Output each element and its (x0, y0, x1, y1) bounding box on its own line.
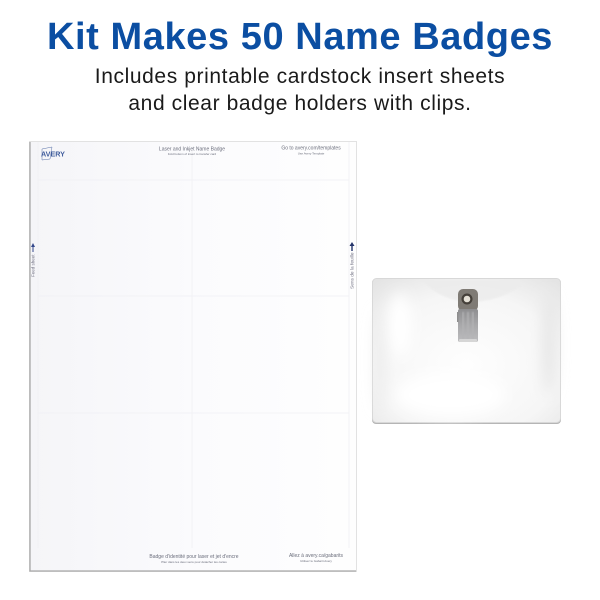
sheet footer text: Plier dans les deux sens pour détacher les cartes (161, 560, 227, 564)
sheet header text: Use Avery Template (298, 152, 325, 156)
sheet footer text: Badge d'identité pour laser et jet d'encre (149, 554, 239, 560)
sheet footer text (149, 553, 344, 564)
badge holder with clip (372, 278, 561, 424)
sheet header text: Go to avery.com/templates (281, 146, 341, 152)
logo: Avery: AVERY (41, 150, 65, 158)
title: Kit Makes 50 Name Badges (47, 16, 553, 58)
metal clip (457, 289, 478, 342)
sheet header text: Laser and Inkjet Name Badge (159, 146, 225, 152)
subtitle (95, 65, 505, 115)
sheet footer text: Utilisez le Gabarit Avery (300, 559, 332, 563)
sheet header text: Fold bottom of insert to transfer card (168, 152, 217, 156)
left feed arrow (30, 243, 36, 277)
sheet footer text: Allez à avery.ca/gabarits (289, 553, 344, 559)
logo: Avery (41, 147, 65, 160)
right feed arrow: Sens de la feuille (350, 252, 356, 289)
left feed arrow: Feed sheet (30, 254, 36, 277)
sheet header text (159, 146, 341, 156)
right feed arrow (350, 242, 356, 289)
subtitle: and clear badge holders with clips. (128, 92, 472, 115)
subtitle: Includes printable cardstock insert sheets (95, 65, 505, 88)
